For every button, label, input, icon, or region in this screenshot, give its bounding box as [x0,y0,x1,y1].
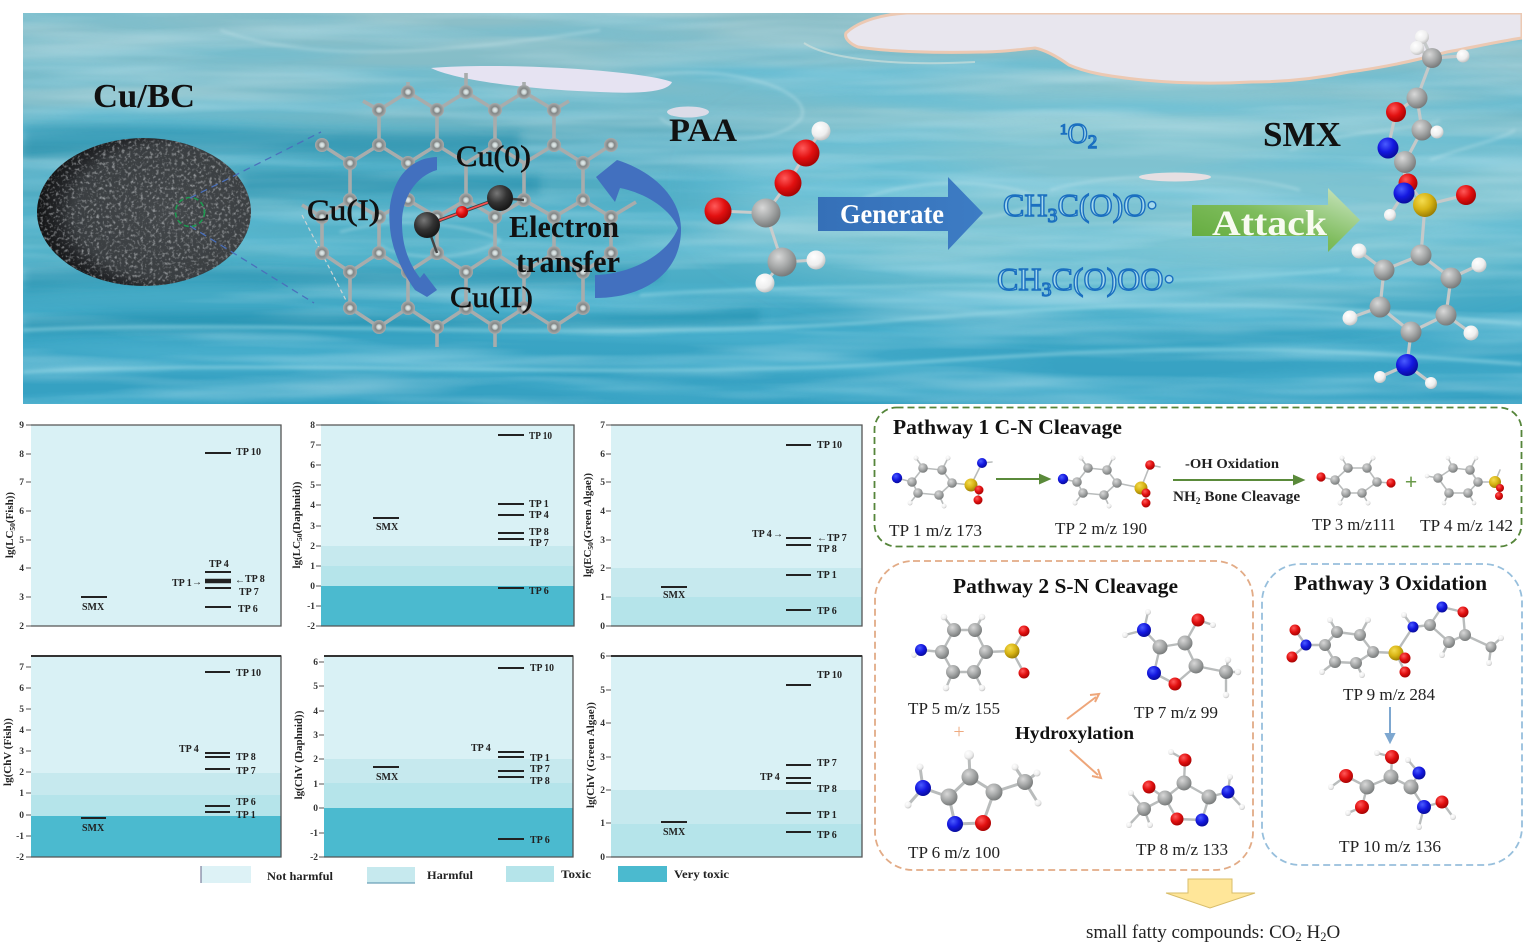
chart: lg LC50 fish: 5 [19,536,24,546]
legend: toxicity classes: Not harmful [267,869,334,883]
icon: PAA molecule [704,122,830,292]
chart: lg LC50 daphnid: 7 [310,441,315,451]
chart: lg ChV fish: TP 7 [236,766,256,777]
molecule: TP 5 [911,614,1030,691]
label: TP 1: TP 1 m/z 173 [889,521,982,540]
label: NH2 bone cleavage: 2 [1196,497,1201,507]
chart: lg ChV fish: TP 1 [236,810,256,821]
label: TP 2: TP 2 m/z 190 [1055,519,1147,538]
arrow: yellow down arrow [1166,879,1255,908]
molecule: TP 4 [1425,456,1504,505]
panel: water banner [23,13,1535,404]
arrow: TP1 to TP2 [996,475,1049,483]
chart: lg ChV green algae: TP 7 [817,758,837,769]
chart: lg ChV fish: 6 [19,684,24,694]
chart: lg LC50 fish: TP 6 [238,604,258,615]
chart: lg LC50 daphnid: 5 [310,481,315,491]
label: Cu(0): Cu(0) [456,140,531,173]
chart: lg LC50 daphnid: 4 [310,501,315,511]
chart: lg LC50 fish: TP 7 [239,587,259,598]
chart: lg ChV fish: 0 [19,811,24,821]
chart: lg LC50 fish: 7 [19,478,24,488]
chart: lg ChV green algae: lg(ChV (Green Algae)) [585,702,597,808]
chart: lg EC50 green algae: TP 8 [817,544,837,555]
chart: lg ChV fish: 3 [19,747,24,757]
chart: lg LC50 fish: 50 [8,523,17,531]
chart: lg EC50 green algae: 2 [600,564,605,574]
chart: lg LC50 fish: 4 [19,564,24,574]
chart: lg LC50 fish: TP 10 [236,447,261,458]
chart: lg ChV daphnid: 4 [313,707,318,717]
arrow: TP 9 to TP 10 [1386,707,1394,742]
panel: pathway 1 C-N cleavage [874,408,1522,546]
arrow: TP2 to TP3 and TP4 [1173,476,1303,484]
chart: lg ChV fish: 5 [19,705,24,715]
chart: lg ChV daphnid: -2 [310,853,318,863]
arrow: right curved electron cycle [595,160,681,298]
chart: lg ChV green algae: SMX [663,827,686,838]
arrow: to TP 7 [1067,694,1099,719]
chart: lg LC50 fish: 6 [19,507,24,517]
chart: lg ChV green algae: 1 [600,819,605,829]
molecule: TP 1 [892,456,992,508]
chart: lg LC50 daphnid: (Daphnid)) [291,481,303,533]
chart: lg LC50 fish: 3 [19,593,24,603]
molecule: TP 6 [904,750,1042,832]
chart: lg ChV daphnid: 1 [313,780,318,790]
chart: lg ChV daphnid: 0 [313,804,318,814]
chart: lg EC50 green algae: 1 [600,593,605,603]
label: Cu(I): Cu(I) [307,194,380,227]
text: end products: 2 [1296,930,1302,944]
chart: lg ChV green algae: 4 [600,719,605,729]
chart: lg EC50 green algae: SMX [663,590,686,601]
icon: SMX molecule [1342,30,1486,389]
chart: lg ChV daphnid: TP 8 [530,776,550,787]
label: TP 3: TP 3 m/z111 [1312,515,1396,534]
label: singlet oxygen: 2 [1088,132,1097,153]
chart: lg LC50 daphnid: 8 [310,421,315,431]
panel: pathway 3 oxidation [1262,564,1522,865]
chart: lg LC50 daphnid: 50 [295,533,304,541]
chart: lg LC50 daphnid: 0 [310,582,315,592]
chart: lg ChV daphnid: TP 10 [530,663,554,674]
chart: lg LC50 daphnid [291,421,574,632]
chart: lg LC50 daphnid: 2 [310,542,315,552]
arrow: to TP 8 [1070,750,1101,778]
chart: lg LC50 daphnid: 3 [310,522,315,532]
arrow: left curved electron cycle [389,157,437,297]
chart: lg ChV daphnid: SMX [376,772,399,783]
chart: lg ChV daphnid: 5 [313,682,318,692]
chart: lg ChV green algae [585,652,862,863]
label: acetoxyl radical: C(O)O• [1057,187,1158,223]
chart: lg ChV green algae: 3 [600,753,605,763]
chart: lg LC50 daphnid: 1 [310,562,315,572]
chart: lg ChV fish: TP 4 [179,744,199,755]
chart: lg LC50 daphnid: TP 8 [529,527,549,538]
label: Cu(II): Cu(II) [450,281,533,314]
chart: lg ChV daphnid: 2 [313,755,318,765]
chart: lg LC50 daphnid: TP 6 [529,586,549,597]
chart: lg ChV green algae: TP 1 [817,810,837,821]
chart: lg EC50 green algae: TP 7 [827,533,847,544]
chart: lg EC50 green algae: TP 6 [817,606,837,617]
text: end products: H [1302,922,1321,943]
icon: biochar particle [37,132,321,303]
heading: Cu/BC: Cu/BC [93,78,195,115]
chart: lg EC50 green algae: 50 [586,542,595,550]
label: TP 10: TP 10 m/z 136 [1339,837,1441,856]
chart: lg LC50 daphnid: TP 10 [529,431,552,442]
chart: lg LC50 fish [4,421,281,632]
label: OH oxidation: -OH Oxidation [1185,457,1279,472]
label: Hydroxylation: Hydroxylation [1015,723,1134,743]
chart: lg EC50 green algae: 5 [600,478,605,488]
chart: lg LC50 daphnid: -1 [307,602,315,612]
chart: lg ChV daphnid [293,656,573,863]
chart: lg EC50 green algae: 6 [600,450,605,460]
chart: lg LC50 daphnid: TP 7 [529,538,549,549]
molecule: TP 10 [1328,750,1456,830]
molecule: TP 2 [1058,456,1160,508]
label: singlet oxygen: 1 [1060,122,1068,138]
chart: lg LC50 fish: 2 [19,622,24,632]
chart: lg LC50 fish: ← [235,575,245,586]
text: end products: O [1326,922,1340,943]
heading: pathway 3: Pathway 3 Oxidation [1294,571,1487,595]
chart: lg EC50 green algae: (Green Algae)) [582,473,594,542]
chart: lg ChV daphnid: lg(ChV (Daphnid)) [293,710,305,799]
symbol: plus: + [1405,469,1417,494]
chart: lg ChV green algae: 2 [600,786,605,796]
molecule: TP 3 [1316,456,1396,506]
chart: lg LC50 daphnid: lg(LC [291,541,303,568]
chart: lg EC50 green algae: 3 [600,536,605,546]
chart: lg LC50 fish: → [192,577,202,588]
label: singlet oxygen: O [1068,119,1088,150]
label: TP 7: TP 7 m/z 99 [1134,703,1218,722]
arrow: Attack: Attack [1212,203,1327,243]
chart: lg ChV daphnid: -1 [310,829,318,839]
text: end products: 2 [1320,930,1326,944]
chart: lg ChV fish: SMX [82,823,105,834]
chart: lg ChV green algae: TP 6 [817,830,837,841]
chart: lg ChV green algae: 0 [600,853,605,863]
molecule: TP 8 [1126,749,1245,828]
label: TP 6: TP 6 m/z 100 [908,843,1000,862]
chart: lg ChV fish: -1 [16,832,24,842]
chart: lg ChV daphnid: 3 [313,731,318,741]
chart: lg EC50 green algae: 7 [600,421,605,431]
chart: lg EC50 green algae: TP 1 [817,570,837,581]
arrow: Generate [818,177,983,250]
label: NH2 bone cleavage: NH [1173,488,1196,505]
chart: lg LC50 daphnid: SMX [376,522,399,533]
chart: lg ChV fish: 1 [19,789,24,799]
legend: toxicity classes: Very toxic [674,867,730,881]
panel: pathway 2 S-N cleavage [875,561,1253,870]
chart: lg ChV daphnid: TP 4 [471,743,491,754]
label: Electron transfer: Electron [509,209,619,244]
chart: lg EC50 green algae: lg(EC [582,550,594,577]
legend: toxicity classes: Harmful [427,868,474,882]
label: TP 9: TP 9 m/z 284 [1343,685,1435,704]
chart: lg EC50 green algae: 0 [600,622,605,632]
chart: lg ChV green algae: TP 8 [817,784,837,795]
chart: lg LC50 fish: 9 [19,421,24,431]
chart: lg ChV daphnid: TP 6 [530,835,550,846]
chart: lg ChV fish: TP 8 [236,752,256,763]
chart: lg LC50 fish: TP 1 [172,578,192,589]
heading: pathway 2: Pathway 2 S-N Cleavage [953,574,1178,598]
arrow: Attack [1192,188,1360,252]
chart: lg LC50 daphnid: 6 [310,461,315,471]
heading: SMX: SMX [1263,115,1341,154]
symbol: plus: + [953,721,965,743]
chart: lg EC50 green algae: TP 4 [752,529,772,540]
label: acetoxyl radical: 3 [1047,205,1057,227]
label: acetylperoxyl radical: CH [997,261,1041,297]
chart: lg EC50 green algae [582,421,862,632]
chart: lg ChV fish: 7 [19,663,24,673]
chart: lg EC50 green algae: 4 [600,507,605,517]
diagram: graphene lattice [302,73,636,347]
label: TP 5: TP 5 m/z 155 [908,699,1000,718]
chart: lg EC50 green algae: TP 10 [817,440,842,451]
chart: lg LC50 daphnid: TP 4 [529,510,549,521]
legend: toxicity classes [201,866,730,883]
chart: lg ChV green algae: 5 [600,686,605,696]
chart: lg LC50 fish: TP 4 [209,559,229,570]
chart: lg ChV fish [2,656,281,863]
label: acetylperoxyl radical: C(O)OO• [1051,261,1175,297]
chart: lg ChV daphnid: 6 [313,658,318,668]
label: acetoxyl radical: CH [1003,187,1047,223]
heading: pathway 1: Pathway 1 C-N Cleavage [893,415,1122,439]
label: acetylperoxyl radical: 3 [1041,279,1051,301]
chart: lg LC50 fish: TP 8 [245,574,265,585]
chart: lg LC50 fish: SMX [82,602,105,613]
chart: lg ChV fish: TP 10 [236,668,261,679]
chart: lg ChV daphnid: TP 7 [530,764,550,775]
chart: lg ChV green algae: 6 [600,652,605,662]
chart: lg ChV fish: lg(ChV (Fish)) [2,718,14,786]
chart: lg ChV fish: 2 [19,768,24,778]
label: NH2 bone cleavage: Bone Cleavage [1201,488,1300,505]
label: Electron transfer: transfer [516,244,620,279]
chart: lg LC50 fish: (Fish)) [4,492,16,523]
chart: lg ChV fish: TP 6 [236,797,256,808]
chart: lg ChV fish: -2 [16,853,24,863]
molecule: TP 7 [1122,609,1241,698]
heading: PAA: PAA [669,113,737,149]
chart: lg LC50 fish: 8 [19,450,24,460]
text: end products: small fatty compounds: CO [1086,922,1296,943]
chart: lg EC50 green algae: ← [817,533,827,544]
chart: lg ChV green algae: TP 10 [817,670,842,681]
chart: lg LC50 daphnid: -2 [307,622,315,632]
chart: lg ChV fish: 4 [19,726,24,736]
chart: lg LC50 daphnid: TP 1 [529,499,549,510]
label: TP 4: TP 4 m/z 142 [1420,516,1513,535]
chart: lg LC50 fish: lg(LC [4,531,16,558]
legend: toxicity classes: Toxic [561,867,592,881]
chart: lg ChV green algae: TP 4 [760,772,780,783]
label: Electron transfer [509,209,620,279]
chart: lg EC50 green algae: → [773,529,783,540]
chart: lg ChV daphnid: TP 1 [530,753,550,764]
label: TP 8: TP 8 m/z 133 [1136,840,1228,859]
arrow: Generate: Generate [840,199,944,229]
molecule: TP 9 [1286,602,1504,678]
